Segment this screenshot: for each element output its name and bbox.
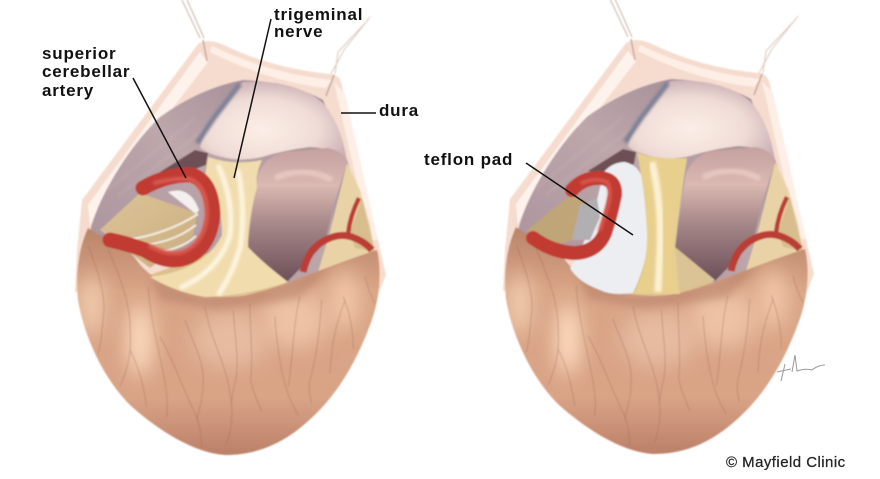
tan wedge beside nerve <box>675 247 715 292</box>
shared anatomy: dura, brain, skin flap <box>503 0 814 454</box>
left panel: nerve compressed by artery <box>75 0 386 455</box>
left nerve root <box>527 193 590 248</box>
teflon pad <box>570 162 650 294</box>
right panel: teflon pad placed <box>503 0 814 454</box>
label: dura: dura <box>379 101 419 120</box>
artist signature mark <box>777 355 825 381</box>
label: superior cerebellar artery: cerebellar <box>42 62 130 81</box>
trigeminal nerve <box>150 157 288 297</box>
label: trigeminal nerve: nerve <box>274 22 323 41</box>
left nerve root <box>100 193 197 268</box>
shared anatomy: dura, brain, skin flap <box>75 0 386 455</box>
label: superior cerebellar artery: superior <box>42 44 116 63</box>
label: teflon pad <box>424 150 633 235</box>
superior cerebellar artery <box>533 178 615 253</box>
label: dura <box>341 101 419 120</box>
trigeminal nerve <box>634 153 687 294</box>
label: teflon pad: teflon pad <box>424 150 513 169</box>
copyright: © Mayfield Clinic <box>726 454 846 471</box>
label: trigeminal nerve <box>234 5 363 178</box>
label: superior cerebellar artery <box>42 44 186 178</box>
superior cerebellar artery <box>110 175 213 260</box>
label: superior cerebellar artery: artery <box>42 81 94 100</box>
label: trigeminal nerve: trigeminal <box>274 5 363 24</box>
grey pad shadow <box>572 198 600 240</box>
